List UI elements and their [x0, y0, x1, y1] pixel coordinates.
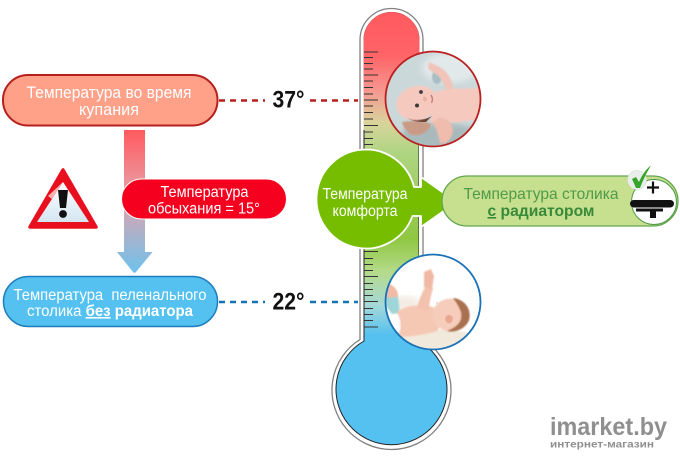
icon: warning triangle — [30, 170, 96, 227]
panel: table with radiator pill: Температура столика — [464, 186, 619, 203]
callout: comfort temperature circle with arrow: Температура — [322, 186, 408, 203]
panel: bathing temperature pill: Температура во время — [26, 84, 192, 102]
panel: drying temperature pill — [122, 179, 286, 219]
panel: drying temperature pill: Температура — [160, 184, 249, 201]
scale: upper ticks — [364, 52, 378, 144]
panel: bathing temperature pill: купания — [79, 101, 139, 119]
arrow: cooling from bath to table — [117, 130, 152, 273]
icon: radiator with plus — [630, 180, 676, 224]
callout: comfort temperature circle with arrow: комфорта — [332, 203, 398, 220]
panel: table with radiator pill: с радиатором — [488, 203, 594, 220]
panel: table without radiator pill — [4, 276, 218, 326]
watermark: imarket.by: интернет-магазин — [550, 438, 654, 450]
panel: table with radiator pill — [442, 176, 678, 226]
connector: 22 degrees — [219, 288, 358, 316]
scale: lower ticks — [364, 252, 378, 327]
callout: comfort temperature circle with arrow — [317, 150, 456, 249]
panel: table without radiator pill: столика без радиатора — [27, 303, 193, 320]
watermark: imarket.by: imarket.by — [550, 413, 667, 441]
icon: green check mark — [628, 166, 651, 190]
photo: baby on changing table — [384, 254, 480, 351]
photo: baby bathing — [385, 50, 482, 149]
panel: table without radiator pill: Температура пеленального — [14, 287, 206, 304]
connector: 22 degrees: 22° — [272, 288, 304, 316]
chart: thermometer — [332, 9, 451, 449]
connector: 37 degrees — [219, 87, 358, 114]
connector: 37 degrees: 37° — [272, 87, 304, 114]
panel: bathing temperature pill — [3, 75, 218, 126]
panel: drying temperature pill: обсыхания = 15° — [148, 200, 260, 218]
